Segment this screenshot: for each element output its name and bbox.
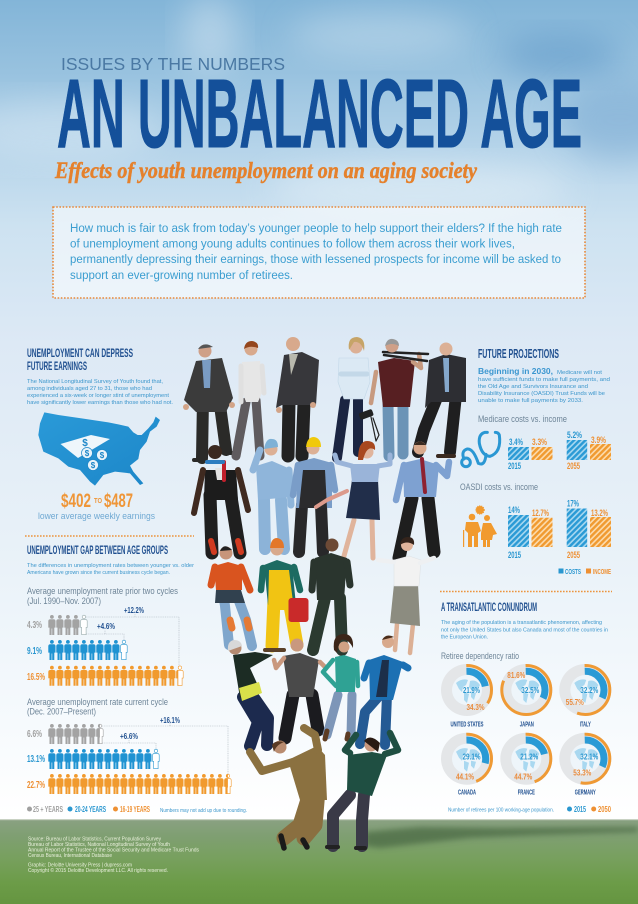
subtitle: Effects of youth unemployment on an aging society [54, 158, 478, 183]
legend: age groups: 25 + YEARS [33, 805, 63, 814]
chart: current cycle: (Dec. 2007–Present) [27, 706, 96, 716]
chart: prior two cycles: +12.2% [124, 605, 144, 615]
donut: Italy: ITALY [580, 720, 591, 728]
chart note: Number of retirees per 100 working-age population. [448, 808, 554, 814]
donut: Japan: 32.5% [521, 685, 540, 695]
body text: Americans have grown since the current business cycle began. [27, 570, 170, 576]
body text: have significantly lower earnings than those who had not. [27, 400, 173, 406]
footer credits: Census Bureau, International Database [28, 853, 112, 859]
panel: unemployment can depress future earnings [27, 346, 173, 522]
divider left [25, 535, 194, 537]
donut: Germany [559, 733, 611, 797]
body text: The differences in unemployment rates between younger vs. older [27, 563, 194, 569]
chart: OASDI costs vs income: 14% [508, 505, 520, 515]
chart: OASDI costs vs income: 2015 [508, 550, 521, 560]
heading: FUTURE EARNINGS [27, 359, 87, 373]
body text: Beginning in 2030, [478, 367, 553, 376]
person: man in blue jacket [360, 636, 408, 745]
icon: stethoscope [462, 432, 500, 467]
heading: UNEMPLOYMENT GAP BETWEEN AGE GROUPS [27, 543, 168, 557]
heading [27, 346, 133, 373]
donut: United States: 21.9% [463, 685, 480, 695]
person: woman in white blouse and gray skirt [378, 537, 434, 653]
intro callout box: support an ever-growing number of retirees. [70, 268, 293, 282]
person: woman in light blue shirt [337, 337, 370, 458]
donut: France: 44.7% [514, 772, 533, 782]
person: worker in black overalls [194, 445, 248, 553]
icon: elderly couple and sun [463, 506, 497, 547]
legend: costs and income: COSTS [565, 569, 581, 576]
grass field [0, 819, 638, 904]
intro callout box [53, 207, 585, 298]
donut: Germany: GERMANY [575, 788, 596, 797]
person: worker in yellow overalls [261, 538, 308, 650]
chart: Medicare costs vs income: 3.3% [532, 437, 547, 447]
donut: Canada: CANADA [458, 788, 476, 797]
donut: Japan: 81.6% [507, 670, 526, 680]
chart: OASDI costs vs income [460, 482, 611, 560]
panel: future projections [460, 346, 611, 576]
earnings figure: $402 [61, 491, 91, 512]
donut: France [500, 733, 552, 797]
footer credits: Graphic: Deloitte University Press | dupress.com [28, 862, 132, 868]
icon: US map with money: $ [100, 451, 105, 460]
body text: the Old Age and Survivors Insurance and [478, 384, 588, 390]
donut: United States: 34.3% [466, 702, 485, 712]
person: older man with cap [183, 344, 235, 460]
footer credits: Source: Bureau of Labor Statistics, Current Population Survey [28, 836, 161, 842]
person: woman in white top [236, 341, 264, 456]
body text: have sufficient funds to make full payments, and [478, 377, 610, 383]
chart: prior two cycles: Average unemployment rate prior two cycles [27, 586, 178, 596]
chart: current cycle: Average unemployment rate current cycle [27, 697, 168, 707]
chart: Medicare costs vs income: 2055 [567, 461, 580, 471]
person: man with hunched posture [418, 342, 466, 456]
person: man in green shirt [327, 733, 398, 848]
chart: OASDI costs vs income: 12.7% [532, 508, 549, 518]
earnings figure: $487 [104, 491, 133, 512]
panel: a transatlantic conundrum [441, 600, 611, 814]
body text [27, 379, 173, 406]
footer credits: Bureau of Labor Statistics, National Longitudinal Survey of Youth [28, 842, 170, 848]
person: nurse in blue scrubs [253, 439, 291, 549]
legend: costs and income: INCOME [593, 569, 611, 576]
legend: years: 2050 [598, 805, 611, 814]
donut: Canada: 44.1% [456, 772, 474, 782]
chart: Medicare costs vs income: 3.4% [509, 437, 523, 447]
chart: OASDI costs vs income: 17% [567, 498, 579, 508]
person: man with tripod and camera [358, 339, 428, 456]
chart: current cycle: +6.6% [120, 731, 138, 741]
body text: The National Longitudinal Survey of Youth found that, [27, 379, 163, 385]
person: man in gray tee [274, 638, 326, 738]
donut: Italy: 55.7% [566, 697, 584, 707]
icon: US map with money: $ [91, 461, 96, 470]
chart: OASDI costs vs income: 13.2% [591, 508, 608, 518]
body text: Disability Insurance (OASDI) Trust Funds will be [478, 391, 605, 397]
donut: Germany: 53.3% [573, 768, 592, 778]
donut: France: 21.2% [520, 752, 539, 762]
chart: Medicare costs vs income: 3.9% [591, 435, 606, 445]
person: man in tan coveralls [250, 728, 327, 848]
donut: Germany: 32.1% [580, 752, 599, 762]
person: worker in yellow helmet [293, 437, 347, 552]
person: man with red tie [396, 442, 449, 558]
body text: The aging of the population is a transatlantic phenomenon, affecting [441, 620, 602, 626]
heading: FUTURE PROJECTIONS [478, 346, 559, 361]
body text: among individuals aged 27 to 31, those who had [27, 386, 152, 392]
chart: current cycle: 22.7% [27, 780, 45, 791]
donut: France: FRANCE [518, 788, 535, 797]
icon: US map with money [38, 412, 160, 486]
divider right [440, 590, 612, 592]
donut: Canada [441, 733, 493, 797]
body text [478, 367, 610, 404]
panel: unemployment gap between age groups [27, 543, 247, 814]
person: man in dark suit [276, 337, 319, 456]
body text: not only the United States but also Canada and most of the countries in [441, 628, 608, 634]
person: man in dark green suit [312, 538, 350, 650]
footer credits: Copyright © 2015 Deloitte Development LLC. All rights reserved. [28, 867, 168, 874]
earnings figure [38, 491, 155, 522]
chart: OASDI costs vs income: 2055 [567, 550, 580, 560]
chart: Medicare costs vs income: 5.2% [567, 430, 582, 440]
chart: OASDI costs vs income: OASDI costs vs. income [460, 482, 538, 492]
donut: Japan: JAPAN [520, 720, 534, 728]
body text: the European Union. [441, 634, 488, 640]
chart: current cycle [27, 697, 232, 794]
chart: current cycle: 13.1% [27, 754, 45, 765]
donut: Japan [500, 664, 552, 728]
person: worker in orange shirt [211, 546, 252, 646]
person: redheaded woman in skirt [335, 441, 390, 558]
illustration: human pyramid of workers [183, 337, 466, 848]
body text: Medicare will not [557, 370, 602, 376]
chart: prior two cycles [27, 586, 184, 686]
legend: age groups: Numbers may not add up due to rounding. [160, 808, 247, 814]
kicker: ISSUES BY THE NUMBERS [61, 54, 285, 74]
legend: costs and income [558, 568, 611, 576]
chart: Medicare costs vs income [462, 414, 611, 471]
intro callout box: permanently depressing their earnings, those with lessened prospects for income will be asked to [70, 252, 561, 266]
body text [441, 620, 608, 640]
chart: current cycle: 6.6% [27, 729, 42, 740]
footer credits [28, 836, 199, 874]
chart: prior two cycles: (Jul. 1990–Nov. 2007) [27, 596, 101, 606]
intro callout box: How much is fair to ask from today’s younger people to help support their elders? If the high rate [70, 221, 562, 235]
earnings figure: lower average weekly earnings [38, 511, 155, 522]
legend: age groups [27, 805, 247, 814]
legend: years: 2015 [574, 805, 586, 814]
footer credits: Annual Report of the Trustee of the Social Security and Medicare Trust Funds [28, 848, 199, 854]
chart: Medicare costs vs income: Medicare costs vs. income [478, 414, 567, 424]
legend: age groups: 16-19 YEARS [120, 805, 150, 814]
panel: a transatlantic conundrum: A TRANSATLANTIC CONUNDRUM [441, 600, 537, 614]
body text: unable to make full payments by 2033. [478, 398, 583, 404]
chart: prior two cycles: +4.6% [97, 621, 115, 631]
chart: Medicare costs vs income: 2015 [508, 461, 521, 471]
person: woman in teal top [323, 634, 358, 739]
icon: US map with money: $ [85, 449, 90, 458]
donut: Italy [559, 664, 611, 728]
earnings figure: TO [94, 498, 102, 505]
person: worker in hi-vis jacket [228, 640, 273, 746]
chart: prior two cycles: 4.3% [27, 620, 42, 631]
donut: United States: UNITED STATES [450, 720, 484, 728]
legend: age groups: 20-24 YEARS [75, 805, 106, 814]
body text: experienced a six-week or longer stint of unemployment [27, 393, 169, 399]
body text [27, 563, 194, 576]
chart: prior two cycles: 9.1% [27, 646, 42, 657]
donut: Italy: 32.2% [580, 685, 599, 695]
chart: prior two cycles: 16.5% [27, 672, 45, 683]
chart label: Retiree dependency ratio [441, 651, 519, 661]
chart: current cycle: +16.1% [160, 715, 180, 725]
icon: US map with money: $ [82, 438, 88, 449]
donut: United States [441, 664, 493, 728]
intro callout box: of unemployment among young adults continues to follow them across their work lives, [70, 236, 515, 250]
legend: years [567, 805, 611, 814]
heading: UNEMPLOYMENT CAN DEPRESS [27, 346, 133, 360]
donut: Canada: 29.1% [462, 752, 481, 762]
